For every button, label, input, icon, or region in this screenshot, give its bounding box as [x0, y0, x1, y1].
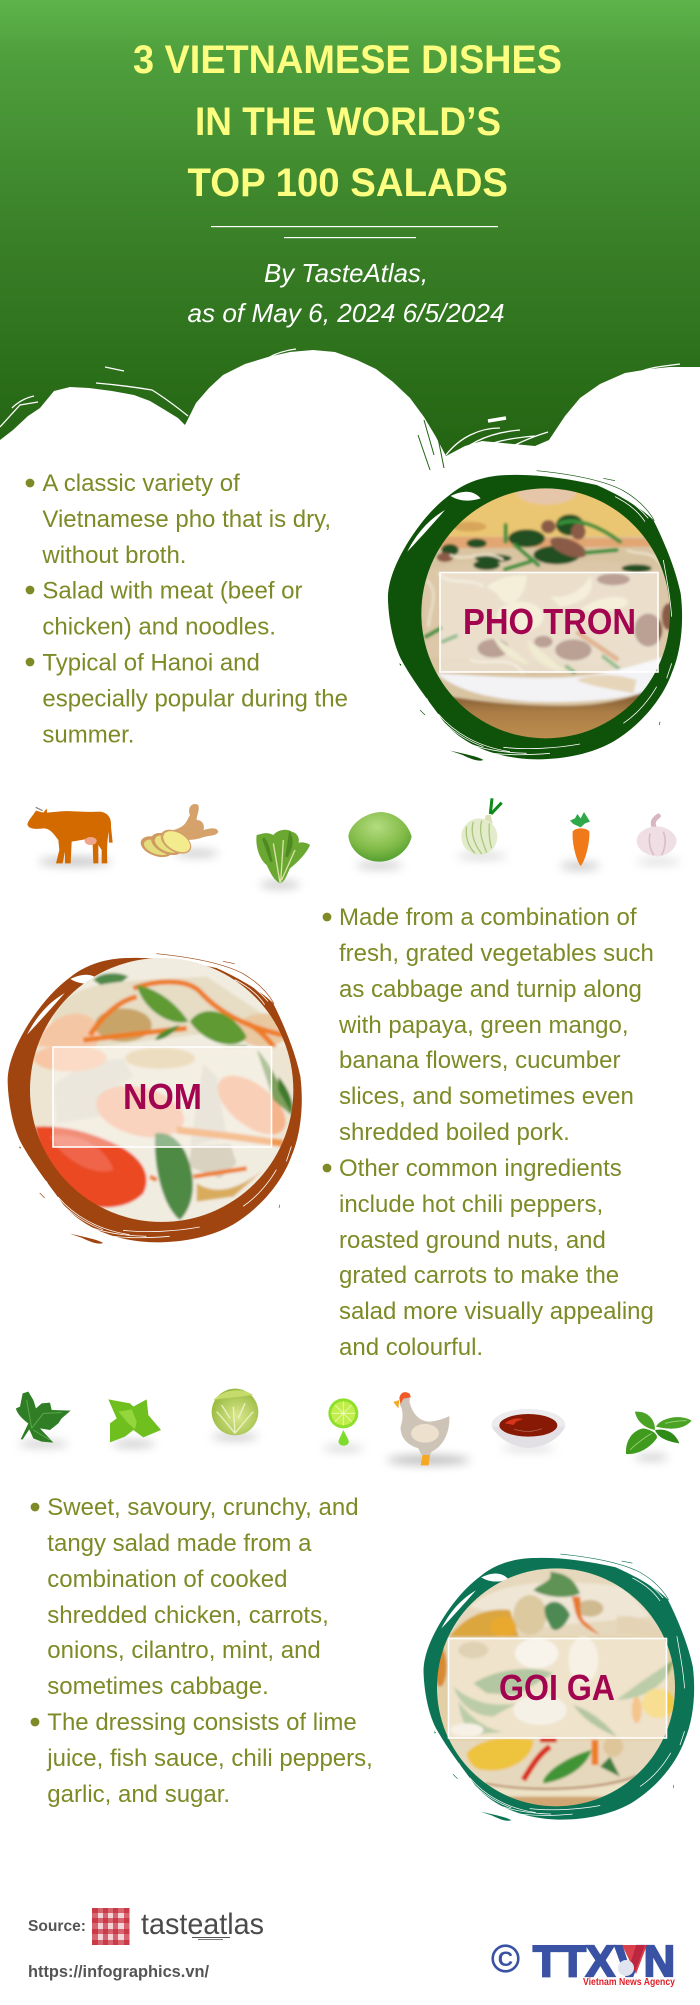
panel: nom text: fresh, grated vegetables such [339, 940, 654, 967]
panel: nom text: with papaya, green mango, [338, 1012, 629, 1039]
icons row 2: chicken, sauce, basil [387, 1392, 692, 1465]
icons row 2: parsley, mint, cabbage, lime [16, 1389, 363, 1451]
panel: nom text: as cabbage and turnip along [339, 976, 642, 1003]
panel: goi ga text: juice, fish sauce, chili peppers, [46, 1745, 373, 1772]
panel: nom text: grated carrots to make the [339, 1262, 619, 1289]
goi ga label box [448, 1638, 666, 1738]
panel: pho tron text [26, 470, 348, 748]
subtitle: By TasteAtlas, [264, 258, 428, 288]
source label: Source: [28, 1918, 86, 1935]
nom label: NOM [123, 1076, 202, 1117]
panel: goi ga text: combination of cooked [47, 1566, 287, 1593]
panel: pho tron text: summer. [42, 722, 134, 748]
panel: goi ga image [424, 1554, 694, 1821]
title [133, 38, 562, 205]
icons row 1: beef, ginger, lettuce [27, 804, 310, 888]
panel: goi ga text: garlic, and sugar. [47, 1781, 230, 1808]
panel: nom text: salad more visually appealing [339, 1298, 654, 1325]
panel: goi ga text [31, 1494, 373, 1808]
website url: https://infographics.vn/ [28, 1962, 209, 1981]
logo: TTXVN Vietnam News Agency: C [498, 1948, 513, 1971]
subtitle [188, 258, 504, 328]
panel: pho tron text: especially popular during the [42, 686, 348, 712]
panel: nom text: roasted ground nuts, and [339, 1227, 606, 1254]
panel: nom image [8, 954, 302, 1244]
panel: nom text: Other common ingredients [339, 1155, 622, 1182]
panel: pho tron text: A classic variety of [42, 470, 240, 497]
nom photo [27, 957, 300, 1223]
pho tron photo [421, 488, 670, 738]
subtitle: as of May 6, 2024 6/5/2024 [188, 298, 504, 328]
panel: pho tron text: Typical of Hanoi and [42, 650, 260, 676]
panel: goi ga text: onions, cilantro, mint, and [47, 1637, 321, 1664]
panel: nom text: Made from a combination of [339, 904, 637, 931]
icon: tasteatlas gingham logo [92, 1908, 130, 1945]
title: 3 VIETNAMESE DISHES [133, 38, 562, 82]
logo: TTXVN Vietnam News Agency: Vietnam News Agency [583, 1976, 675, 1988]
panel: pho tron text: without broth. [41, 542, 186, 569]
panel: pho tron text: chicken) and noodles. [42, 614, 276, 640]
header panel: green gradient with brush edge [0, 0, 700, 490]
panel: nom text: banana flowers, cucumber [339, 1047, 620, 1074]
pho tron label box [440, 572, 658, 672]
goi ga photo [433, 1567, 680, 1813]
panel: goi ga text: shredded chicken, carrots, [47, 1602, 329, 1629]
goi ga label: GOI GA [499, 1667, 615, 1708]
title: TOP 100 SALADS [188, 161, 508, 205]
pho tron label: PHO TRON [463, 601, 636, 642]
logo: TTXVN Vietnam News Agency: TTXVN [533, 1937, 675, 1986]
panel: nom text: and colourful. [339, 1334, 483, 1361]
title: IN THE WORLD’S [195, 100, 501, 144]
panel: goi ga text: The dressing consists of lime [47, 1709, 357, 1736]
panel: nom text [323, 904, 654, 1361]
panel: goi ga text: sometimes cabbage. [47, 1673, 269, 1700]
panel: pho tron text: Salad with meat (beef or [42, 578, 303, 604]
nom label box [53, 1047, 272, 1147]
panel: nom text: include hot chili peppers, [339, 1191, 603, 1218]
icons row 1: lime, onion, carrot, garlic [348, 798, 680, 869]
tasteatlas wordmark: tasteatlas [141, 1908, 264, 1941]
panel: nom text: shredded boiled pork. [339, 1119, 570, 1146]
panel: goi ga text: Sweet, savoury, crunchy, and [47, 1494, 359, 1521]
panel: goi ga text: tangy salad made from a [47, 1530, 312, 1557]
panel: pho tron text: Vietnamese pho that is dry, [42, 506, 331, 533]
panel: pho tron image [388, 471, 687, 761]
panel: nom text: slices, and sometimes even [339, 1083, 634, 1110]
